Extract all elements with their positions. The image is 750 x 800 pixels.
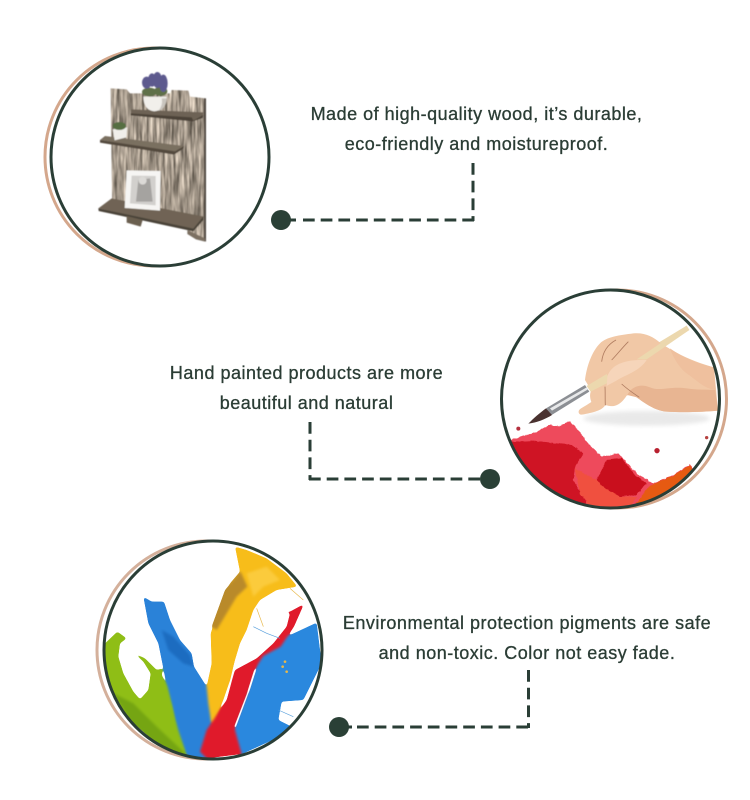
tan offset ring (45, 48, 263, 266)
dark ring (51, 48, 269, 266)
top shelf (131, 109, 203, 121)
description text (170, 363, 443, 413)
panel: wood shelf feature (45, 48, 642, 266)
white circle background (502, 290, 720, 508)
dark ring (104, 541, 322, 759)
description text: beautiful and natural (220, 393, 393, 413)
description text (311, 104, 642, 154)
picture frame (125, 170, 161, 211)
photo: rustic wooden wall shelf (98, 72, 206, 242)
white circle background (104, 541, 322, 759)
tan offset ring (508, 290, 726, 508)
red splash (200, 604, 304, 758)
connector dot (329, 717, 349, 737)
connector dot (480, 469, 500, 489)
panel: hand painted feature (170, 290, 726, 510)
red watercolour wash (510, 422, 694, 510)
description text: eco-friendly and moistureproof. (345, 134, 608, 154)
left blue splash (143, 597, 213, 760)
dashed connector (290, 163, 474, 221)
bottom shelf (98, 198, 204, 230)
white circle background (51, 48, 269, 266)
green splash (102, 632, 187, 757)
panel: pigments feature (97, 541, 711, 760)
description text: Made of high-quality wood, it’s durable, (311, 104, 642, 124)
brush handle front and thumb (586, 374, 608, 392)
small succulent (113, 127, 127, 140)
middle shelf (100, 136, 184, 153)
description text (343, 613, 711, 663)
photo: colourful paint splashes (102, 547, 322, 760)
description text: Hand painted products are more (170, 363, 443, 383)
dashed connector (348, 670, 530, 728)
description text: and non-toxic. Color not easy fade. (379, 643, 675, 663)
dark ring (502, 290, 720, 508)
brush ferrule and bristles (546, 385, 589, 415)
tan offset ring (97, 541, 315, 759)
yellow splash (207, 547, 297, 725)
description text: Environmental protection pigments are safe (343, 613, 711, 633)
hand (579, 333, 718, 415)
right blue splash (235, 623, 322, 755)
connector dot (271, 210, 291, 230)
droplets (253, 588, 303, 717)
photo: hand with brush above red watercolour (510, 326, 718, 510)
pot and lavender (142, 87, 167, 96)
dashed connector (309, 422, 482, 480)
brush handle (587, 326, 689, 392)
